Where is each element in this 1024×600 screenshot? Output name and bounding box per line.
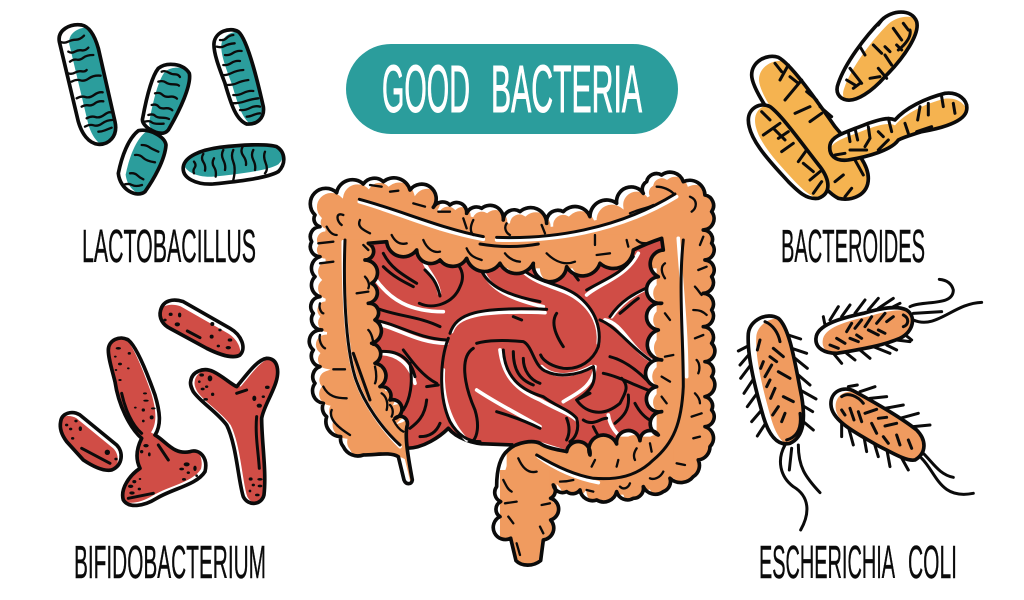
large intestine: colon: [309, 172, 720, 568]
title badge: GOOD: [382, 52, 470, 127]
panel: lactobacillus: LACTOBACILLUS: [82, 220, 256, 272]
panel: bifidobacterium: [57, 300, 282, 588]
illustration: intestines: [309, 172, 720, 568]
panel: escherichia coli: [738, 279, 982, 588]
panel: lactobacillus: [59, 25, 284, 272]
icon: e. coli cells: [738, 279, 982, 530]
icon: bifidobacterium cells: [57, 300, 282, 505]
icon: bacteroides rods: [748, 12, 967, 204]
title badge: [346, 44, 678, 134]
panel: bacteroides: [748, 12, 967, 272]
title badge: BACTERIA: [491, 52, 642, 127]
small intestine: [368, 237, 662, 450]
text: BIFIDOBACTERIUM: [74, 536, 266, 588]
icon: lactobacillus rods: [59, 25, 284, 195]
panel: escherichia coli: COLI: [908, 536, 957, 588]
